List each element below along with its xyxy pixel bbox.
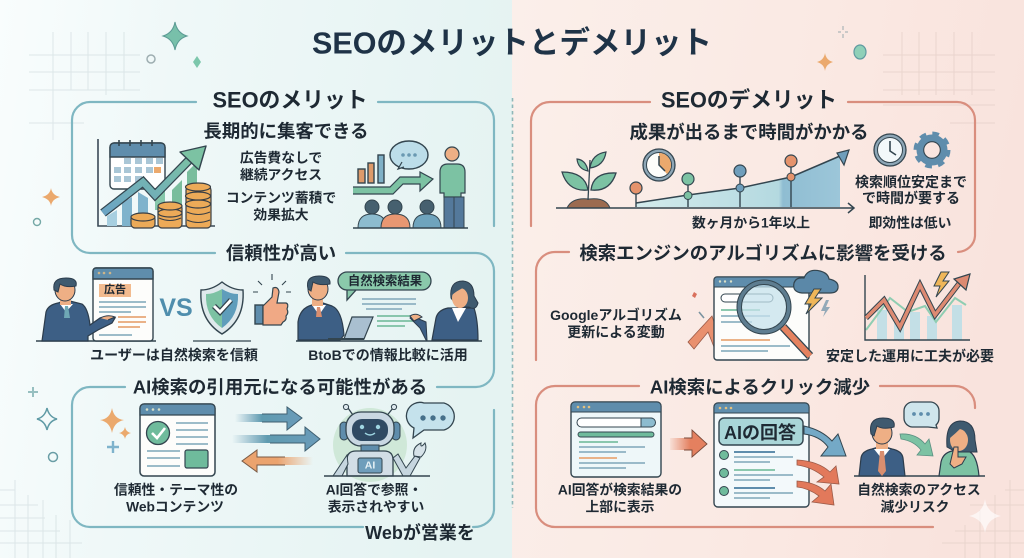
icon: users with decline	[854, 418, 985, 476]
center divider	[512, 98, 514, 508]
icon: clock	[874, 134, 906, 166]
card heading: AI検索の引用元になる可能性がある	[133, 376, 427, 398]
text: no ad cost	[240, 150, 322, 182]
text: VS: VS	[159, 294, 193, 322]
clipped footer text: Webが営業を	[365, 522, 475, 543]
card heading: 成果が出るまで時間がかかる	[629, 122, 869, 142]
sparkles top right	[817, 26, 866, 71]
text: content accumulation	[226, 190, 336, 222]
icon: growth chart with calendar and coins	[98, 139, 215, 228]
label: AI answer on top: 上部に表示	[586, 498, 655, 514]
card: takes time	[531, 102, 975, 252]
card: AI click decline	[536, 376, 985, 527]
icon: AI robot	[324, 404, 430, 482]
decorative grid: bottom left	[0, 480, 82, 558]
card: AI citation	[72, 376, 494, 527]
label: AI references: 表示されやすい	[328, 498, 424, 514]
arrow: to AI 2	[232, 427, 320, 451]
card: trustworthy	[36, 242, 494, 387]
text: google update	[550, 307, 682, 340]
label: low immediacy: 即効性は低い	[869, 214, 951, 230]
sparkles left middle	[34, 188, 60, 226]
decorative grid: top left	[29, 32, 140, 140]
chart: slow growth timeline	[556, 150, 854, 213]
section heading: demerits: SEOのデメリット	[661, 88, 837, 112]
arrow: decline 2	[797, 481, 834, 505]
label: AI answer on top	[558, 482, 682, 514]
panel: merits	[36, 88, 494, 543]
text: ranking stabilization: 検索順位安定まで	[855, 174, 967, 190]
text: content accumulation: 効果拡大	[253, 206, 309, 222]
icon: clock with orange wedge	[643, 149, 675, 181]
text: no ad cost: 広告費なしで	[240, 150, 322, 166]
arrow: to AI answer	[670, 430, 707, 457]
speech bubble: organic search results	[338, 272, 431, 300]
card heading: 検索エンジンのアルゴリズムに影響を受ける	[579, 242, 947, 264]
icon: gear	[916, 134, 948, 166]
panel: demerits	[531, 88, 994, 527]
icon: thumbs up	[253, 274, 291, 325]
label: BtoB comparison: BtoBでの情報比較に活用	[308, 347, 468, 363]
speech bubble: users	[904, 402, 939, 428]
result lines	[362, 299, 416, 326]
icon: presenter with audience	[353, 141, 468, 228]
label: users trust organic: ユーザーは自然検索を信頼	[90, 347, 258, 363]
label: organic access risk	[857, 482, 981, 514]
label: AI references	[326, 482, 424, 514]
icon: search results page	[571, 402, 661, 477]
icon: AI answer page	[714, 403, 809, 507]
sparkles left lower	[28, 387, 58, 462]
icon: businessman with laptop	[296, 276, 482, 341]
arrow: to AI 1	[235, 407, 302, 430]
label: AI answer on top: AI回答が検索結果の	[558, 482, 682, 498]
speech bubble: organic search results: 自然検索結果	[348, 273, 423, 288]
icon: businessman with ad page: 広告	[104, 282, 126, 296]
title: SEOのメリットとデメリット	[312, 26, 712, 60]
card heading: AI検索によるクリック減少	[650, 376, 870, 398]
label: stable operation: 安定した運用に工夫が必要	[826, 348, 994, 364]
decorative grid: bottom right	[942, 480, 1024, 558]
decorative grid: top right	[883, 32, 995, 123]
speech bubble: robot	[406, 402, 454, 438]
icon: AI answer page: AIの回答	[724, 422, 796, 443]
label: AI references: AI回答で参照・	[326, 482, 422, 498]
icon: shield with check	[193, 282, 251, 341]
text: ranking stabilization: で時間が要する	[862, 190, 960, 206]
label: web content	[114, 482, 238, 514]
sparkle bottom right	[969, 499, 1001, 533]
card: algorithm	[536, 242, 994, 364]
label: web content: Webコンテンツ	[126, 500, 224, 514]
section heading: merits: SEOのメリット	[212, 88, 368, 112]
icon: sparkles	[100, 408, 131, 453]
icon: storm cloud	[794, 270, 838, 317]
text: google update: 更新による変動	[567, 324, 665, 340]
icon: web page with check	[140, 404, 215, 476]
text: no ad cost: 継続アクセス	[240, 166, 322, 182]
sparkles top left	[147, 22, 201, 68]
arrow: AI answer to users	[804, 426, 846, 456]
icon: sprout	[562, 152, 616, 208]
text: ranking stabilization	[855, 174, 967, 206]
chart: volatile line chart	[865, 272, 970, 340]
text: content accumulation: コンテンツ蓄積で	[226, 190, 336, 206]
arrow: decline 1	[797, 460, 839, 484]
icon: AI robot: AI	[365, 460, 375, 472]
arrow: from AI	[242, 450, 313, 472]
icon: businessman with ad page	[36, 268, 156, 341]
arrow: green curved	[900, 434, 933, 456]
card heading: 信頼性が高い	[226, 242, 336, 264]
text: google update: Googleアルゴリズム	[550, 307, 682, 323]
card: long-term traffic	[72, 102, 494, 253]
label: web content: 信頼性・テーマ性の	[114, 482, 238, 498]
icon: businesswoman	[410, 281, 478, 340]
icon: browser with magnifier	[714, 277, 810, 360]
label: organic access risk: 減少リスク	[881, 498, 949, 514]
label: organic access risk: 自然検索のアクセス	[857, 482, 981, 498]
label: months to a year: 数ヶ月から1年以上	[692, 214, 810, 230]
card heading: 長期的に集客できる	[203, 120, 369, 142]
icon: broken line	[688, 292, 722, 349]
